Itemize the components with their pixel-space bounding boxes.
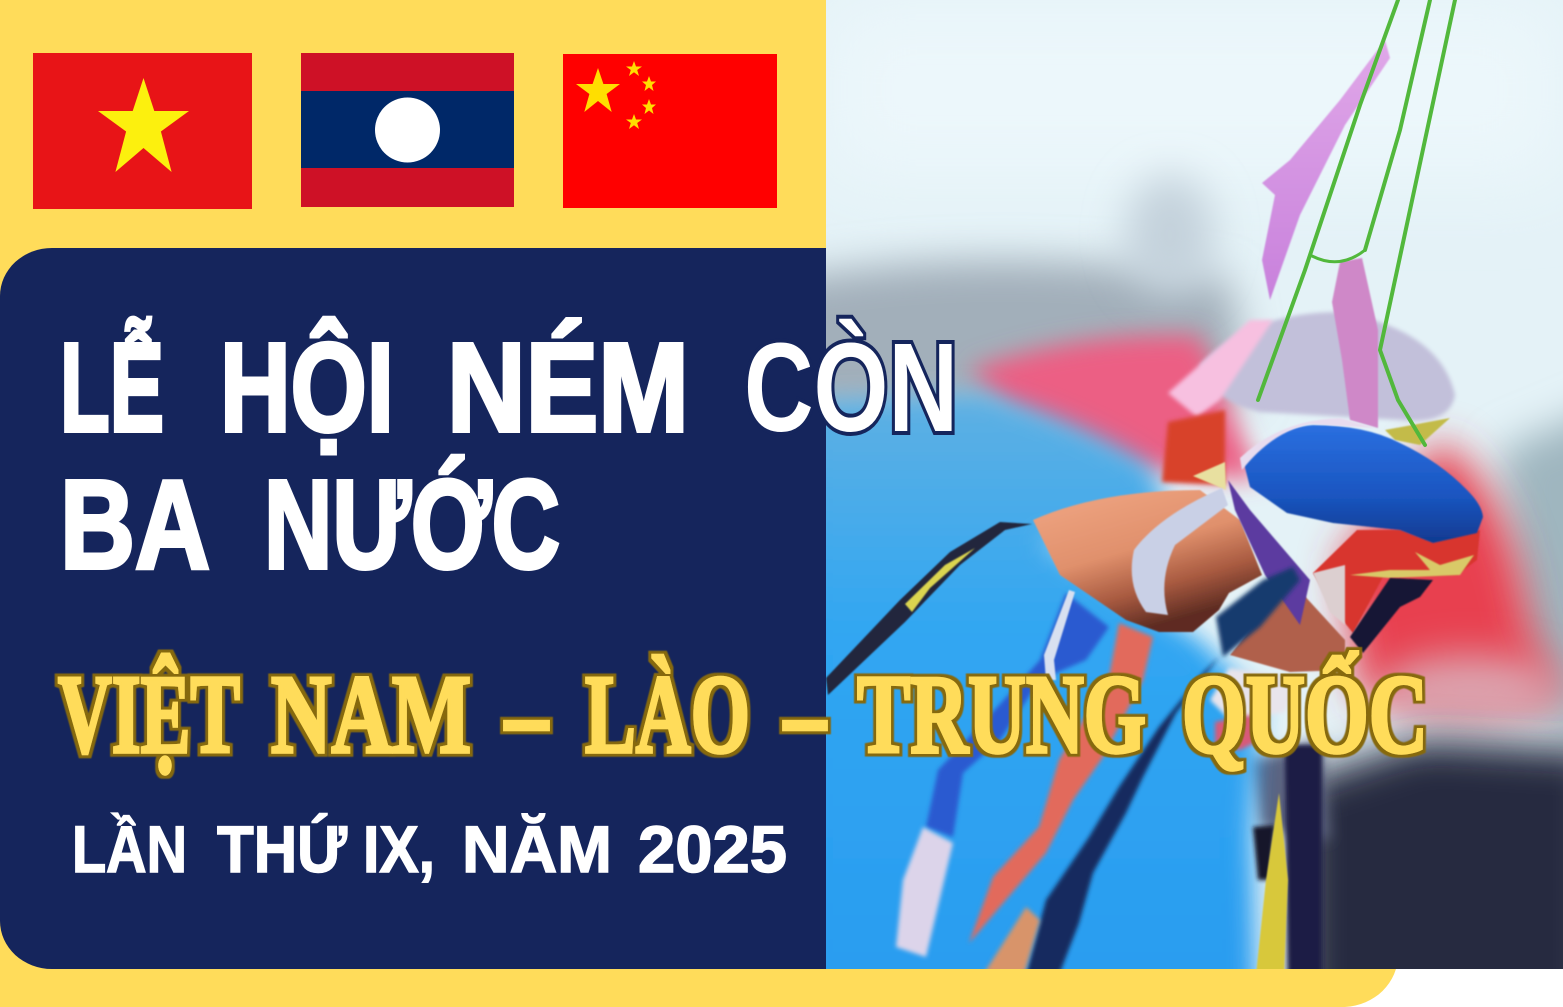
black strap [1350, 578, 1433, 653]
subtitle: countries: TRUNG [857, 653, 1146, 777]
dark streak beside yellow [1253, 825, 1275, 880]
purple ribbon top [1262, 40, 1390, 300]
distant crowd haze [780, 260, 1250, 420]
red blurred background right [1340, 440, 1563, 700]
edition line: THỨ [217, 812, 347, 886]
pink zip [1332, 258, 1378, 428]
pink blurred umbrella [970, 334, 1260, 480]
red embroidered cuff [1313, 530, 1480, 633]
white zip band [1132, 488, 1228, 615]
title line 1: NÉM [447, 317, 689, 458]
edition line: NĂM [462, 812, 612, 886]
subtitle: countries [58, 651, 1428, 777]
subtitle: countries: VIỆT [58, 653, 240, 777]
subtitle: countries: – [504, 653, 549, 777]
edition line: LẦN [72, 812, 187, 886]
flag: Laos [301, 53, 514, 207]
title line 2: BA [60, 454, 210, 595]
pale pink strip [1168, 320, 1273, 417]
subtitle: countries: NAM [271, 653, 471, 777]
blue cloth [800, 392, 1260, 1000]
subtitle: countries: QUỐC [1182, 651, 1428, 777]
subtitle: countries: LÀO [585, 653, 750, 777]
lower tan lobe [1230, 596, 1346, 673]
title line 1: CÒN [744, 317, 958, 458]
photo: hanging con ball with ribbons [780, 0, 1563, 1007]
edition line [72, 812, 787, 886]
dark blurred lower right [1300, 740, 1563, 1007]
title line 1 [60, 317, 958, 458]
title line 2 [60, 454, 560, 595]
flag: China [563, 54, 777, 208]
title line 2: NƯỚC [264, 454, 560, 595]
grey-lilac ball [1200, 312, 1455, 421]
title line 1: LỄ [60, 317, 164, 458]
tan lower ball [1033, 490, 1262, 632]
streamers [826, 522, 1032, 695]
subtitle: countries: – [783, 653, 827, 777]
title [60, 317, 958, 595]
yellow trim [1385, 418, 1450, 445]
edition line: 2025 [638, 812, 787, 886]
navy title panel [0, 248, 826, 969]
flag: Vietnam [33, 53, 252, 209]
blue ball [1243, 425, 1483, 543]
red embroidered ball back [1162, 410, 1225, 485]
purple binding [1228, 480, 1310, 625]
green cords [1258, 0, 1455, 445]
edition line: IX, [363, 812, 435, 886]
title line 1: HỘI [220, 317, 394, 458]
